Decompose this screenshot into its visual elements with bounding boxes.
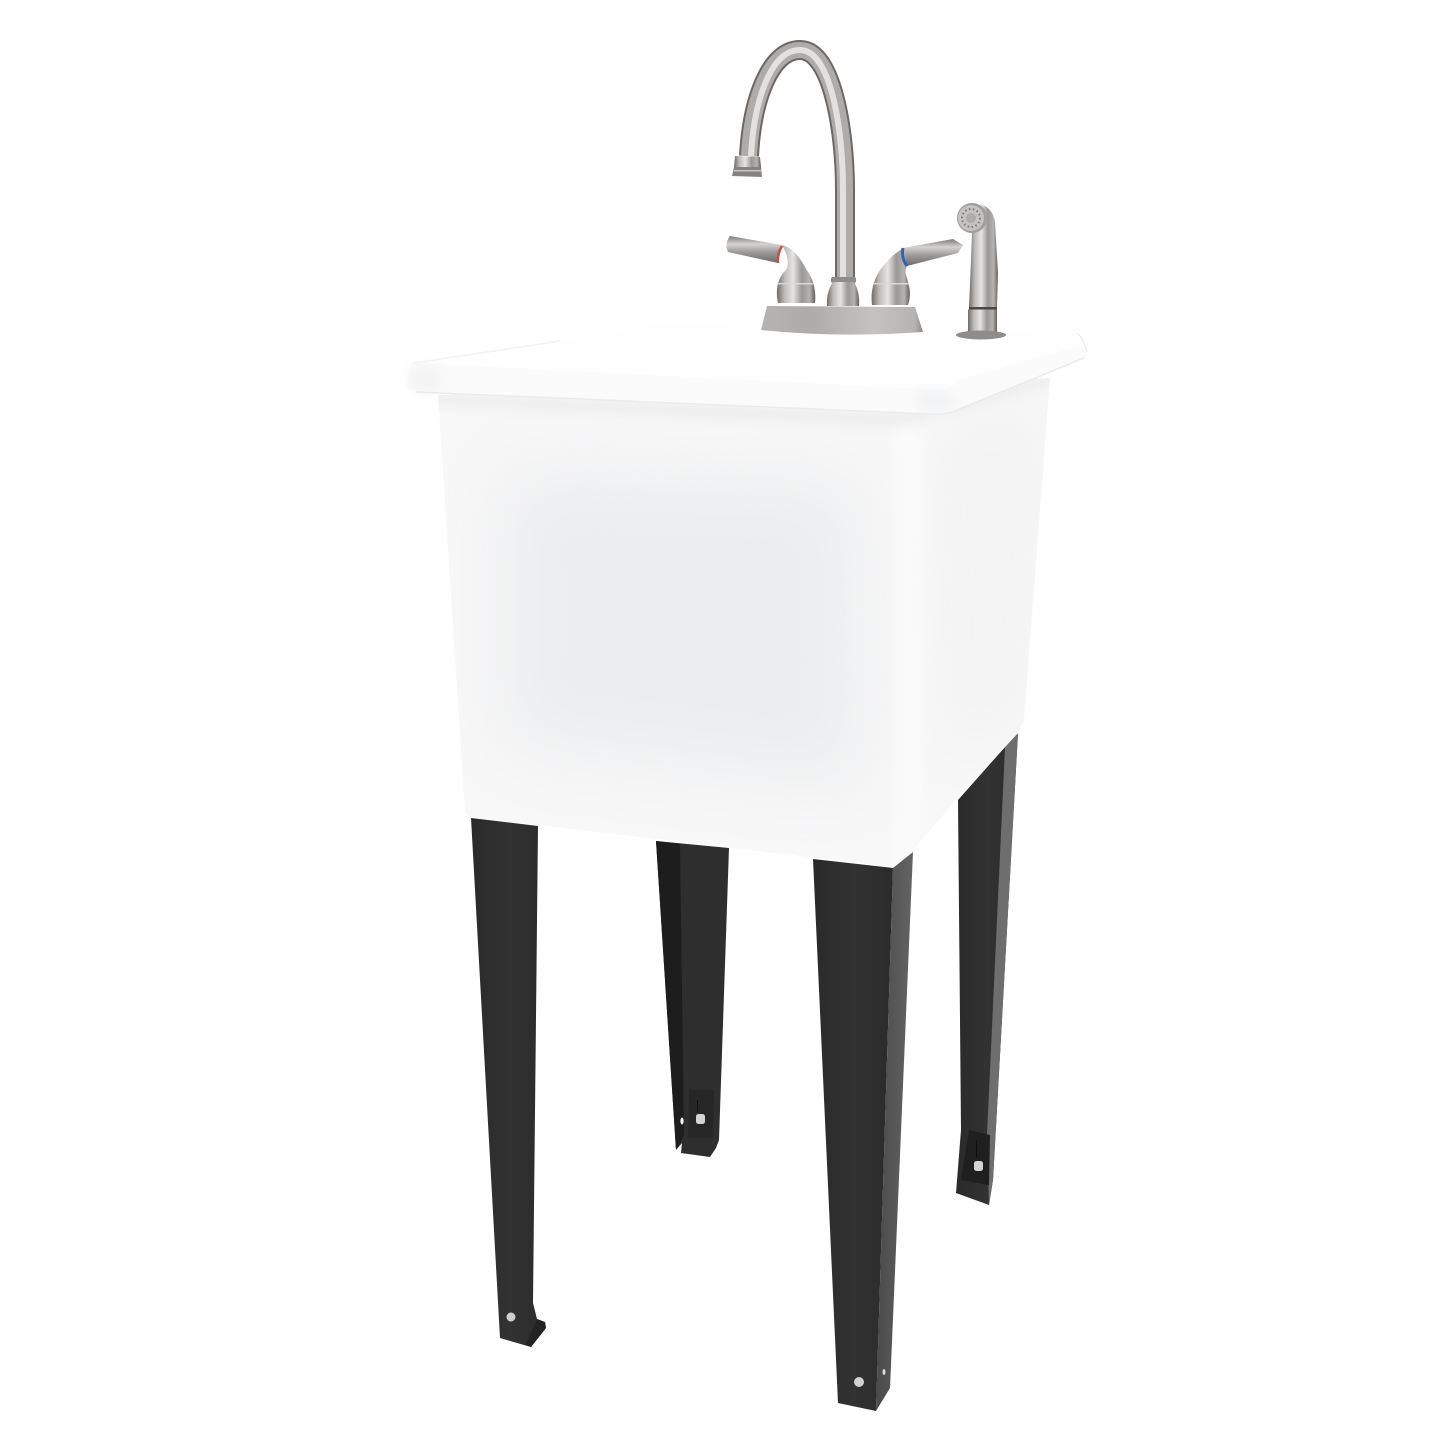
sprayer base	[956, 330, 1006, 340]
back left leg	[656, 841, 729, 1157]
back right leg	[956, 733, 1018, 1205]
front left leg	[471, 818, 546, 1347]
sink tub body	[438, 378, 1050, 828]
rim front band	[407, 345, 1087, 414]
corner highlight	[896, 430, 922, 870]
faucet collar	[827, 277, 859, 306]
gooseneck spout	[749, 50, 845, 285]
aerator nut	[732, 156, 762, 177]
deck plate	[761, 306, 923, 335]
bolt	[854, 1377, 864, 1387]
bolt	[696, 1114, 705, 1124]
sprayer collar	[969, 307, 997, 310]
under rim shadow	[794, 416, 900, 421]
bolt	[974, 1161, 983, 1171]
rim corner shade	[915, 390, 960, 414]
sprayer head	[957, 203, 987, 233]
rim top edge	[414, 341, 560, 363]
left handle	[726, 236, 815, 303]
rim left shade	[410, 366, 440, 392]
red hot ring	[778, 246, 782, 263]
product illustration: utility sink	[412, 40, 1088, 1411]
blue cold ring	[902, 248, 907, 266]
sprayer body	[969, 204, 998, 307]
side sprayer	[956, 203, 1006, 340]
side face shade	[950, 410, 1040, 780]
sink rim	[407, 322, 1087, 414]
front right leg	[813, 852, 913, 1411]
right handle	[872, 239, 963, 305]
front face shade	[520, 490, 846, 762]
bolt	[506, 1312, 516, 1322]
